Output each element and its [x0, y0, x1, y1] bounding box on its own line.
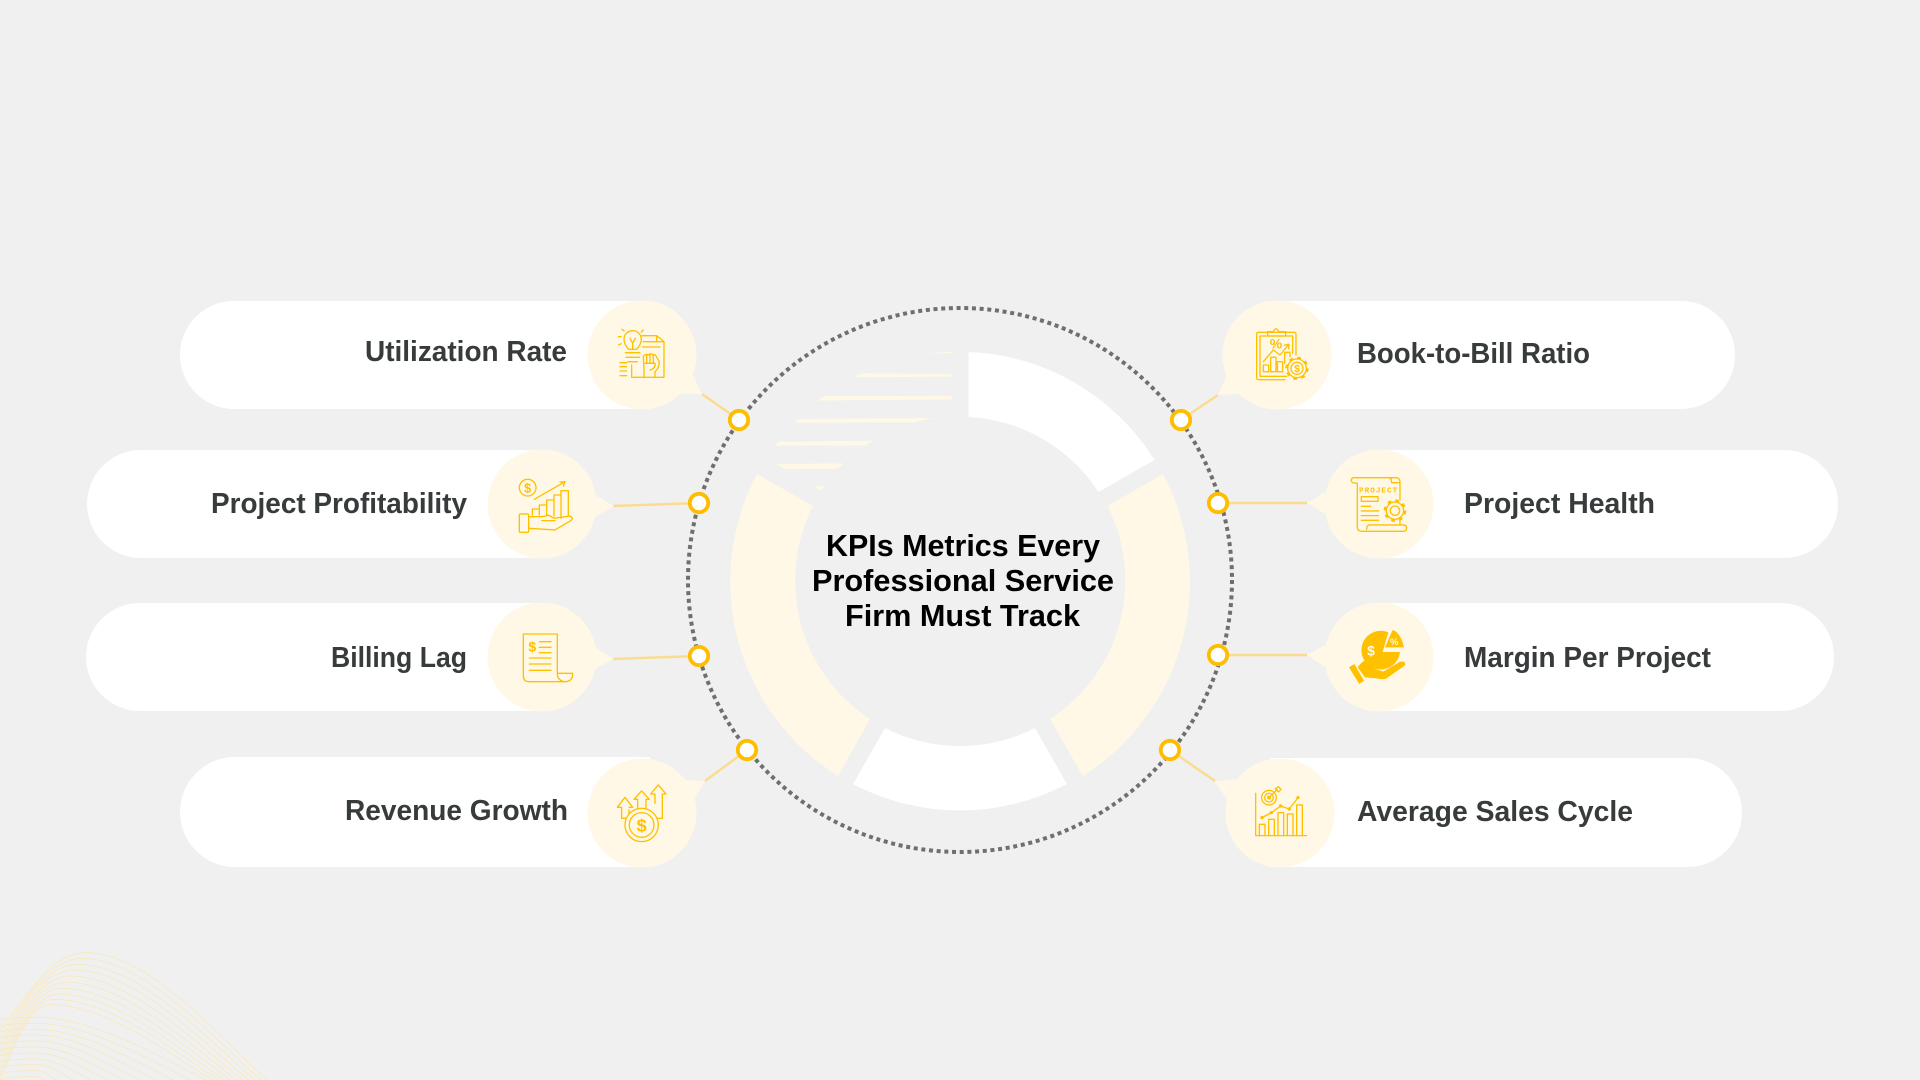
- icon: arrows and dollar coin: $: [637, 816, 647, 836]
- node: lower left: [690, 647, 708, 665]
- badge: Revenue Growth: [588, 758, 705, 868]
- badge: Book-to-Bill Ratio: [1218, 300, 1332, 410]
- decorative wave lines bottom left: [0, 953, 267, 1080]
- pill: Project Health: [1370, 450, 1838, 558]
- label: Book-to-Bill Ratio: Book-to-Bill Ratio: [1357, 338, 1590, 370]
- icon: clipboard with chart and gear: [1257, 329, 1307, 380]
- segment: top left striped cream: [774, 352, 952, 491]
- badge: Project Health: [1307, 450, 1434, 558]
- icon: pie chart over hand: %: [1390, 637, 1399, 647]
- node: bottom right: [1161, 741, 1179, 759]
- node: lower right: [1209, 646, 1227, 664]
- title: Firm Must Track: [845, 598, 1081, 633]
- icon: lightbulb and fist document: [618, 329, 664, 377]
- segment: bottom white: [853, 728, 1067, 810]
- label: Revenue Growth: Revenue Growth: [345, 795, 568, 827]
- node: upper left: [690, 494, 708, 512]
- title: [812, 528, 1114, 633]
- pill: Average Sales Cycle: [1270, 758, 1742, 867]
- segment: left cream: [730, 474, 870, 776]
- icon: project scroll and gear: [1351, 478, 1407, 531]
- pill: Book-to-Bill Ratio: [1270, 301, 1735, 409]
- icon: hand with rising bars and coin: [519, 479, 572, 532]
- icon: arrows and dollar coin: [617, 785, 666, 842]
- label: Project Health: Project Health: [1464, 488, 1655, 520]
- icon: bar chart with target: [1256, 787, 1307, 836]
- connector lines: [613, 394, 1307, 781]
- pill: Project Profitability: [87, 450, 550, 558]
- icon: hand with rising bars and coin: $: [524, 481, 531, 495]
- icon: clipboard with chart and gear: %: [1270, 336, 1283, 352]
- dotted outer ring: [688, 308, 1232, 852]
- pill: Revenue Growth: [180, 757, 650, 867]
- segment: right cream: [1050, 474, 1190, 776]
- pill: Margin Per Project: [1370, 603, 1834, 711]
- icon: clipboard with chart and gear: $: [1294, 364, 1300, 375]
- badge: Margin Per Project: [1307, 602, 1434, 712]
- icon: pie chart over hand: [1349, 630, 1405, 684]
- label: Project Profitability: Project Profitability: [211, 488, 467, 520]
- label: Margin Per Project: Margin Per Project: [1464, 642, 1711, 674]
- badge: Utilization Rate: [588, 300, 702, 410]
- title: Professional Service: [812, 563, 1114, 598]
- badge: Project Profitability: [488, 450, 614, 558]
- icon: invoice scroll: $: [528, 638, 536, 654]
- icon: invoice scroll: [523, 634, 573, 682]
- label: Billing Lag: Billing Lag: [331, 642, 467, 674]
- icon: pie chart over hand: $: [1367, 642, 1375, 658]
- segment ring: [730, 352, 1190, 810]
- badge: Billing Lag: [488, 602, 614, 712]
- title: KPIs Metrics Every: [826, 528, 1101, 563]
- label: Average Sales Cycle: Average Sales Cycle: [1357, 796, 1633, 828]
- pill: Billing Lag: [86, 603, 550, 711]
- node: upper right: [1209, 494, 1227, 512]
- node: top left: [730, 411, 748, 429]
- pill: Utilization Rate: [180, 301, 650, 409]
- node: bottom left: [738, 741, 756, 759]
- icon: project scroll and gear: PROJECT: [1359, 488, 1398, 496]
- segment: top right white: [969, 352, 1154, 492]
- node: top right: [1172, 411, 1190, 429]
- badge: Average Sales Cycle: [1215, 758, 1334, 868]
- label: Utilization Rate: Utilization Rate: [365, 336, 567, 368]
